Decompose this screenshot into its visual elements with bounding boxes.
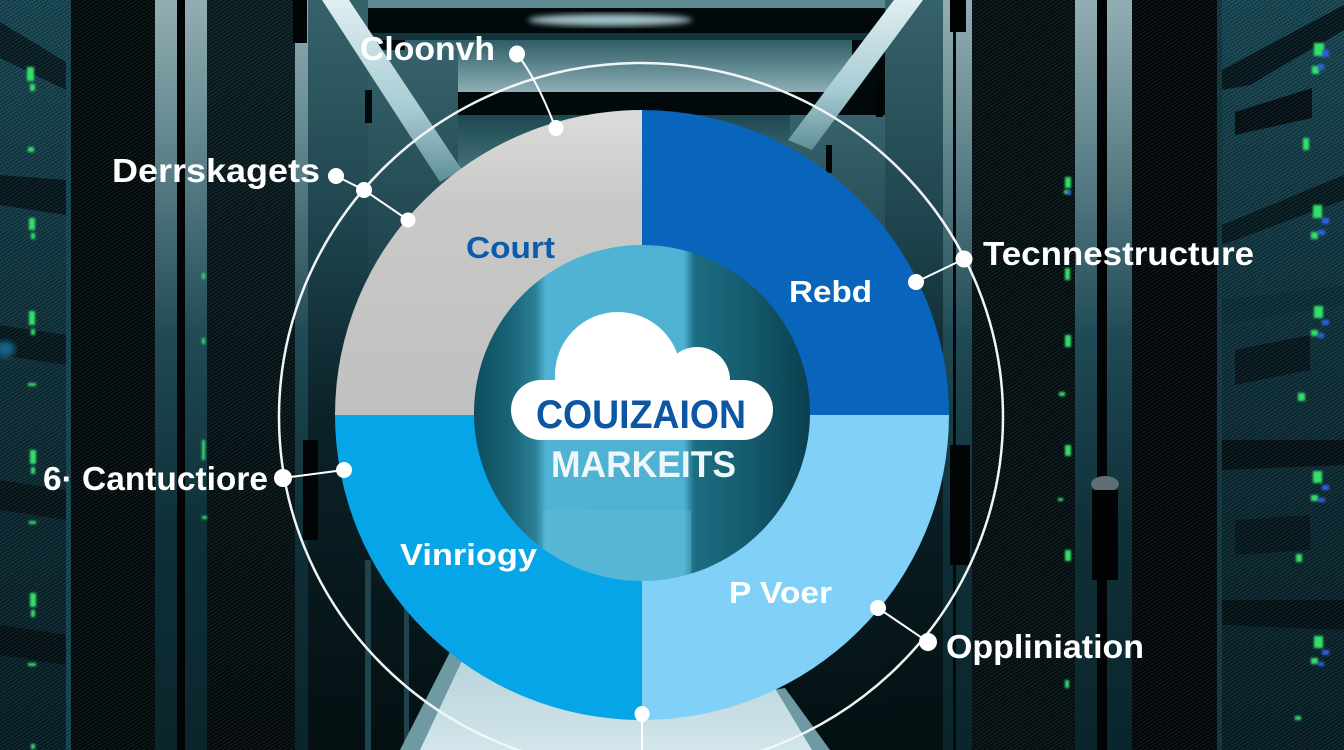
donut chart [335,110,949,720]
segment: Court (grey) [335,110,642,415]
cloud icon [511,312,773,440]
callout: Cloonvh [360,30,564,136]
callout: Cantuctiore: 6· Cantuctiore [43,460,268,497]
segment label: Rebd: Rebd [789,274,872,309]
right steel posts and panels [788,0,1132,750]
right rack with shelves [1132,0,1344,750]
corridor ceiling bands [340,0,940,185]
outer thin ring [279,63,1003,750]
left rack with shelves [0,0,155,750]
title: cloud label: COUIZAION [536,393,746,437]
left steel posts and panels [155,0,462,750]
segment: P Voer (light blue) [642,415,949,720]
segment: Rebd (dark blue) [642,110,949,415]
callout: Cloonvh: Cloonvh [360,30,495,67]
callout: Tecnnestructure: Tecnnestructure [983,235,1254,272]
callout: bottom connector [634,706,650,750]
segment label: P Voer: P Voer [729,575,832,610]
segment: Vinriogy (mid blue) [335,415,642,720]
central hub circle [470,240,815,585]
callout: Derrskagets: Derrskagets [112,152,320,189]
callout: Tecnnestructure [908,235,1254,290]
callout: Oppliniation: Oppliniation [946,628,1144,665]
segment label: Court: Court [466,230,555,265]
corridor floor [400,648,830,750]
segment label: Vinriogy: Vinriogy [400,537,538,572]
subtitle: markets: MARKEITS [551,444,736,485]
callout: Oppliniation [870,600,1144,665]
callout: Derrskagets [112,152,416,228]
